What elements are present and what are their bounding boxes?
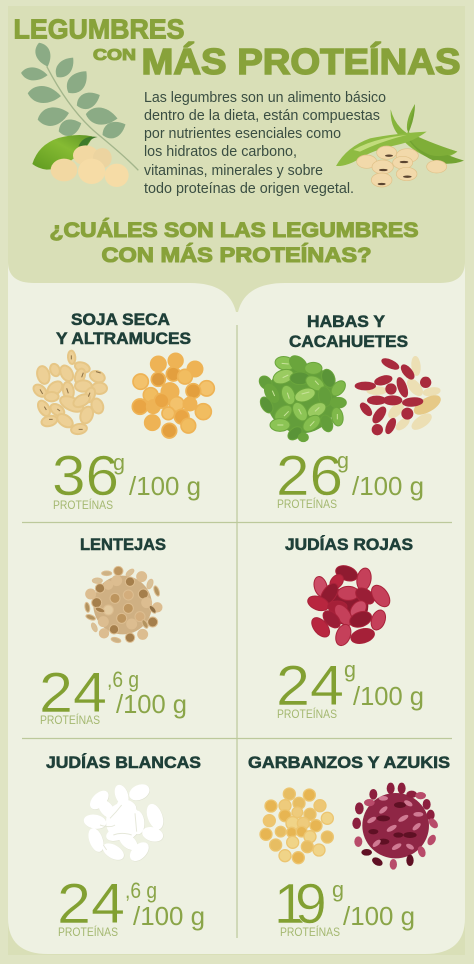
white bean creases bbox=[100, 805, 137, 850]
text block: introduction bbox=[144, 90, 386, 197]
bean eyes bbox=[378, 154, 412, 185]
protein value: 24 g: PROTEÍNAS bbox=[277, 708, 337, 721]
protein value: 19 g: PROTEÍNAS bbox=[280, 926, 340, 939]
fava bean highlights bbox=[272, 363, 337, 426]
heading: question: ¿CUÁLES SON LAS LEGUMBRES bbox=[50, 219, 419, 242]
protein value: 24,6 g: 24 bbox=[57, 872, 125, 936]
protein value: 36 g bbox=[52, 444, 201, 512]
pea pod bbox=[32, 135, 92, 170]
panel: light content card bbox=[8, 262, 465, 954]
heading: LENTEJAS bbox=[80, 536, 166, 554]
protein value: 24,6 g: ,6 g bbox=[107, 667, 139, 692]
protein value: 24,6 g: PROTEÍNAS bbox=[58, 926, 118, 939]
icon: soybean pods and beans bbox=[336, 104, 464, 187]
panel: soja seca y altramuces bbox=[31, 311, 214, 512]
heading: CACAHUETES bbox=[289, 333, 408, 351]
panel: habas y cacahuetes bbox=[257, 313, 442, 511]
protein value: 19 g: /100 g bbox=[343, 901, 415, 931]
chickpeas bbox=[51, 145, 112, 181]
text block: introduction: Las legumbres son un alimento básico bbox=[144, 90, 386, 106]
protein value: 24,6 g: /100 g bbox=[133, 901, 205, 931]
heading: Y ALTRAMUCES bbox=[56, 330, 191, 348]
protein value: 26 g: /100 g bbox=[352, 471, 424, 501]
icon: peanuts bbox=[355, 357, 442, 435]
panel: lentejas bbox=[39, 536, 187, 727]
icon: lentils bbox=[84, 566, 162, 644]
text block: introduction: vitaminas, minerales y sobre bbox=[144, 163, 323, 179]
protein value: 24 g bbox=[276, 654, 424, 721]
protein value: 26 g: g bbox=[337, 448, 349, 473]
protein value: 36 g: PROTEÍNAS bbox=[53, 499, 113, 512]
protein value: 24,6 g: ,6 g bbox=[125, 878, 157, 903]
protein value: 24,6 g: 24 bbox=[39, 661, 107, 725]
panel: judías rojas bbox=[276, 535, 424, 721]
icon: lupins bbox=[132, 353, 214, 438]
pod calyx bbox=[78, 137, 98, 146]
heading: SOJA SECA bbox=[71, 311, 170, 329]
title line: legumbres: LEGUMBRES bbox=[14, 14, 184, 44]
protein value: 24 g: 24 bbox=[276, 654, 344, 718]
heading bbox=[289, 313, 408, 351]
pods bbox=[391, 109, 457, 159]
icon: fava beans bbox=[257, 352, 348, 443]
protein value: 24 g: /100 g bbox=[353, 681, 424, 711]
heading: GARBANZOS Y AZUKIS bbox=[248, 754, 450, 772]
heading bbox=[56, 311, 191, 348]
protein value: 36 g: g bbox=[113, 450, 125, 475]
protein value: 26 g bbox=[276, 444, 424, 511]
text block: introduction: dentro de la dieta, están compuestas bbox=[144, 108, 380, 124]
protein value: 19 g: 19 bbox=[274, 872, 327, 936]
protein value: 36 g: /100 g bbox=[129, 471, 201, 501]
heading: JUDÍAS ROJAS bbox=[285, 535, 413, 554]
protein value: 19 g: g bbox=[332, 877, 344, 902]
protein value: 36 g: 36 bbox=[52, 444, 119, 508]
title bbox=[14, 14, 460, 82]
title line: con: CON bbox=[93, 47, 136, 64]
heading: HABAS Y bbox=[307, 313, 385, 331]
vertical and horizontal dividers bbox=[22, 325, 452, 938]
leaves bbox=[20, 40, 129, 142]
panel: lower corner background bbox=[8, 262, 465, 955]
protein value: 24,6 g bbox=[39, 661, 187, 727]
icon: kidney beans bbox=[306, 563, 394, 648]
soybean eyes bbox=[40, 355, 101, 429]
branch stem bbox=[47, 66, 138, 170]
heading: question: CON MÁS PROTEÍNAS? bbox=[102, 244, 372, 267]
protein value: 26 g: PROTEÍNAS bbox=[277, 498, 337, 511]
protein value: 24,6 g: PROTEÍNAS bbox=[40, 714, 100, 727]
icon: chickpeas bbox=[260, 788, 333, 864]
panel: garbanzos y azukis bbox=[248, 754, 450, 939]
panel: green header bbox=[8, 6, 465, 312]
heading: question bbox=[50, 219, 419, 267]
protein value: 19 g bbox=[274, 872, 415, 939]
heading: JUDÍAS BLANCAS bbox=[46, 753, 201, 772]
icon: branch with pod and chickpeas bbox=[20, 40, 138, 187]
panel: judías blancas bbox=[46, 753, 205, 939]
text block: introduction: los hidratos de carbono, bbox=[144, 144, 297, 160]
icon: soybeans bbox=[31, 350, 107, 435]
icon: white beans bbox=[83, 782, 166, 864]
protein value: 24,6 g bbox=[57, 872, 205, 939]
protein value: 26 g: 26 bbox=[276, 444, 343, 508]
beans bbox=[357, 146, 447, 187]
protein value: 24 g: g bbox=[344, 657, 356, 682]
icon: azuki beans bbox=[352, 783, 440, 870]
protein value: 24,6 g: /100 g bbox=[116, 689, 187, 719]
text block: introduction: por nutrientes esenciales como bbox=[144, 126, 341, 142]
title line: más proteínas: MÁS PROTEÍNAS bbox=[142, 41, 460, 82]
text block: introduction: todo proteínas de origen vegetal. bbox=[144, 181, 354, 197]
